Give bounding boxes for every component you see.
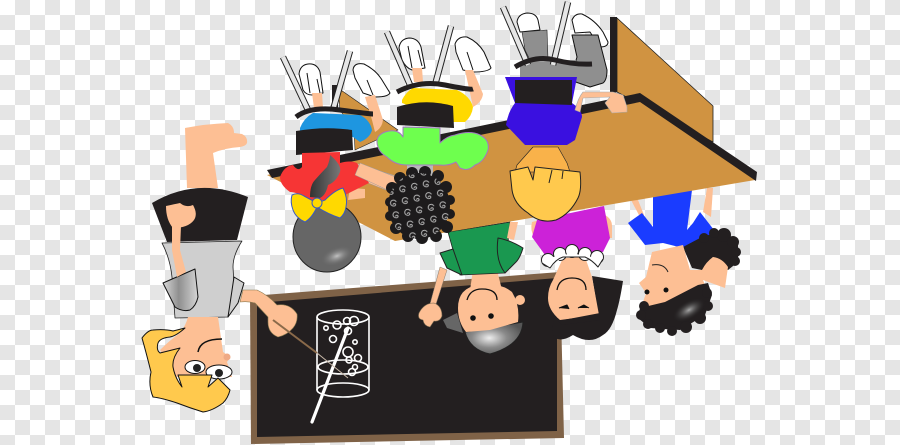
teacher grey shirt <box>162 241 244 318</box>
student: green shirt with cap <box>418 222 525 354</box>
table back panel left <box>332 85 338 108</box>
teacher pointing arm <box>240 290 297 337</box>
table <box>267 17 757 241</box>
teacher blond hair <box>142 328 230 412</box>
student: blue shirt with curly hair <box>628 188 741 336</box>
teacher eyes <box>185 360 232 379</box>
table black edge <box>267 93 757 181</box>
student: magenta dress with black hair <box>531 206 623 340</box>
teacher <box>142 123 348 412</box>
teacher face <box>160 317 232 377</box>
blackboard <box>250 272 564 444</box>
seated student: purple shirt and blond hair <box>503 2 627 221</box>
table top surface <box>267 100 755 241</box>
teacher black skirt <box>152 188 248 242</box>
seated student: bright green shirt and curly hair <box>355 26 491 244</box>
beaker drawing with bubbles <box>312 310 369 422</box>
table back panel right <box>610 17 713 142</box>
pointer stick <box>273 320 348 378</box>
teacher legs <box>185 123 247 188</box>
teacher raised arm and fist <box>166 203 196 277</box>
seated student: red shirt and bow <box>280 51 396 272</box>
